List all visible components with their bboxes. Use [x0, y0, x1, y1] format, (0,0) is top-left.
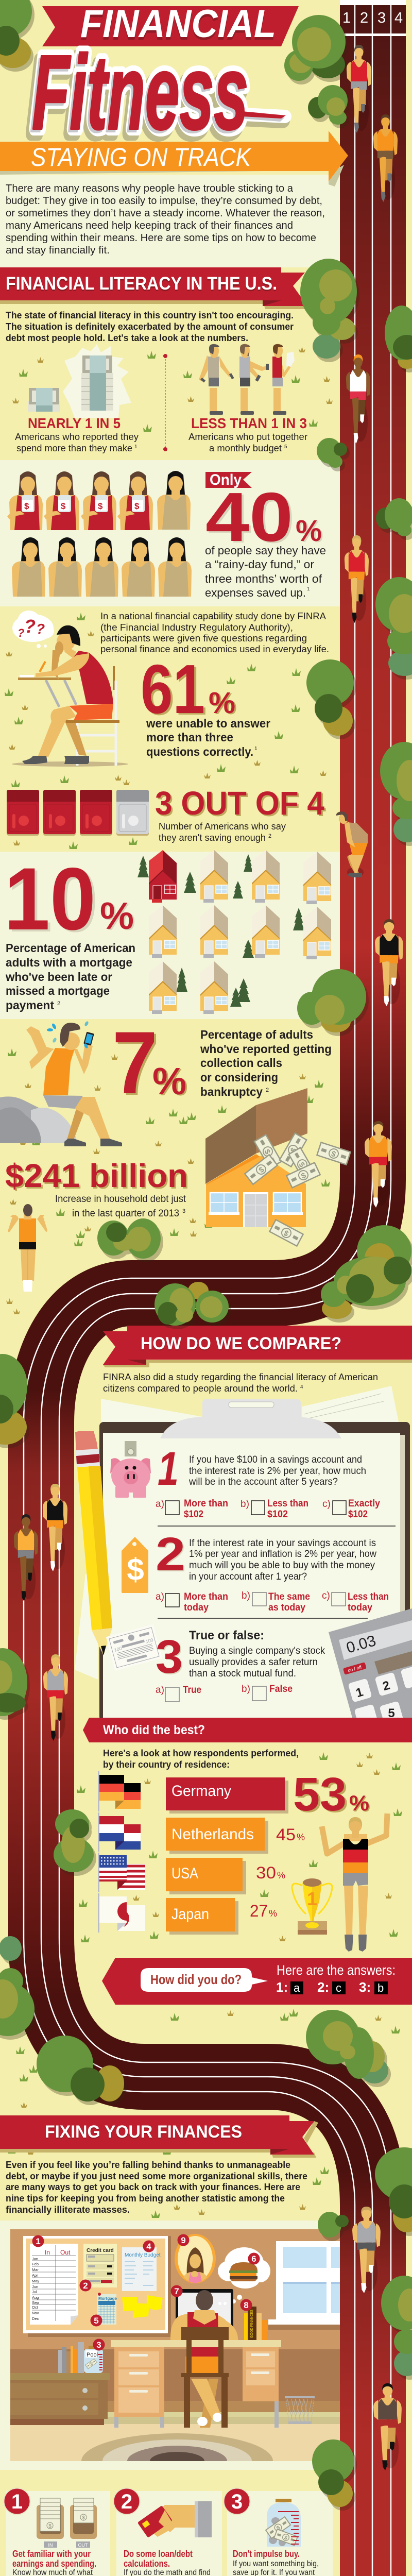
answers ribbon: Here are the answers: — [277, 1962, 396, 1978]
question 3: a) — [156, 1685, 164, 1696]
question 3: False — [269, 1684, 293, 1694]
track lane numbers top: 3 — [377, 10, 386, 26]
portrait — [175, 2234, 216, 2283]
stat: only 40 percent: % — [296, 514, 322, 548]
cabinet with books and pool jar — [10, 2342, 110, 2425]
icon: calculator — [329, 1608, 412, 1728]
illustration: trophy — [292, 1878, 332, 1935]
question 3: Buying a single company's stock — [189, 1646, 325, 1656]
monthly budget note — [122, 2247, 161, 2291]
room illustration — [10, 2229, 340, 2461]
room number badges: 2 — [83, 2281, 88, 2291]
icon: calculator: 1 — [354, 1685, 365, 1700]
stat: less than 1 in 3 — [188, 415, 307, 453]
sticky notes — [122, 2295, 163, 2318]
stat: 10 percent: missed a mortgage — [6, 984, 110, 997]
answers ribbon: a — [294, 1981, 300, 1994]
title script: Fitness: Fitness — [32, 33, 248, 151]
stat: 7 percent: 7 — [112, 1013, 158, 1112]
bar: Germany 53%: % — [349, 1791, 369, 1815]
stat: 3 out of 4: Number of Americans who say — [159, 821, 286, 832]
bar: Japan 27%: 27 — [250, 1902, 268, 1920]
answers ribbon — [102, 1958, 412, 2005]
bar: USA 30% — [166, 1858, 285, 1894]
question 3: True or false: — [189, 1629, 264, 1642]
illustration: winning German athlete — [322, 1814, 387, 1952]
stat: 7 percent: Percentage of adults — [200, 1028, 313, 1041]
stat: 10 percent: % — [101, 895, 135, 938]
stat: 61 percent: 1 — [254, 746, 258, 752]
stat: 7 percent: collection calls — [200, 1056, 282, 1070]
icon: three budgeting men — [199, 344, 295, 415]
title banner: FINANCIAL: FINANCIAL — [80, 5, 276, 48]
stat: 7 percent: 2 — [266, 1087, 269, 1093]
stat: 3 out of 4: 3 OUT OF 4 — [157, 786, 326, 823]
calendar sheet: Jun — [32, 2284, 38, 2289]
stat: 61 percent: 61 — [143, 652, 207, 730]
stat: only 40 percent: Only — [210, 471, 242, 488]
desk and person from behind — [111, 2289, 281, 2428]
compare intro text — [103, 1372, 378, 1394]
tip badges: 1 — [11, 2490, 23, 2513]
credit card note: Credit card — [87, 2248, 114, 2253]
stat: 61 percent: more than three — [146, 731, 233, 744]
section ribbon: how do we compare: HOW DO WE COMPARE? — [141, 1335, 341, 1354]
icon: stock certificate: 100 — [145, 1637, 154, 1645]
mortgage note — [97, 2293, 117, 2325]
answers ribbon: 2: — [317, 1979, 329, 1995]
bar: Japan 27%: Japan — [171, 1906, 209, 1923]
section ribbon: fixing your finances — [0, 2115, 318, 2158]
stat: only 40 percent: 1 — [307, 586, 310, 592]
FINRA text — [100, 611, 329, 654]
illustration: house bursting with money — [205, 1088, 351, 1246]
stat: 10 percent: % — [100, 894, 134, 937]
tip 1 text — [12, 2549, 101, 2576]
results intro: by their country of residence: — [103, 1759, 230, 1770]
question 3: usually provides a safer return — [189, 1657, 318, 1668]
room number badges: 5 — [94, 2316, 99, 2326]
section intro text: debt most people hold. Let's take a look at the numbers. — [6, 333, 248, 343]
corkboard — [23, 2236, 171, 2337]
question 3: 3 — [157, 1632, 184, 1684]
stat: $241 billion: 3 — [182, 1208, 185, 1214]
icon: stock certificate: 100 — [114, 1646, 123, 1653]
stat: only 40 percent: % — [297, 515, 323, 549]
bar: USA 30%: 30 — [256, 1863, 276, 1882]
credit card note — [83, 2244, 117, 2287]
stat: nearly 1 in 5: Americans who reported they — [15, 432, 139, 442]
room number badges: 7 — [174, 2286, 179, 2296]
icon: calculator: 2 — [381, 1679, 391, 1693]
pictogram: ten women, four with savings jars: $ — [61, 501, 66, 511]
icon: price tag — [122, 1537, 148, 1593]
tip icon: in and out trays: OUT — [78, 2543, 88, 2548]
question 2: today — [184, 1602, 209, 1613]
stat: less than 1 in 3: Americans who put together — [188, 432, 307, 442]
question 3: b) — [242, 1684, 250, 1694]
clipboard quiz — [75, 1386, 410, 1721]
room number badges: 9 — [181, 2235, 186, 2245]
tip icon: in and out trays: $ — [48, 2523, 52, 2529]
tip badges: 2 — [121, 2490, 132, 2513]
wastebasket — [285, 2396, 315, 2424]
intro paragraph: There are many reasons why people have trouble sticking to a — [6, 183, 294, 194]
stat: 10 percent: 2 — [57, 1001, 60, 1007]
ribbon: who did the best — [83, 1718, 412, 1742]
question 2: in your account after 1 year? — [189, 1571, 307, 1582]
stat: only 40 percent — [205, 471, 326, 599]
bar: Germany 53%: % — [350, 1792, 370, 1816]
icon: pencil — [75, 1431, 112, 1655]
illustration: student taking a test: ? — [18, 626, 24, 639]
question 2: much will you be able to buy with the money — [189, 1560, 375, 1571]
tip 2 text: Do some loan/debt — [124, 2549, 193, 2559]
stat: nearly 1 in 5: 1 — [134, 444, 138, 450]
illustration: trophy: 1 — [307, 1888, 317, 1909]
calendar sheet: Feb — [32, 2262, 39, 2266]
question 2: a) — [156, 1591, 164, 1602]
illustration: man standing from behind — [8, 1204, 47, 1292]
title script: Fitness — [29, 33, 286, 156]
illustration: student taking a test: ? — [24, 616, 36, 637]
calendar sheet: Aug — [32, 2295, 39, 2300]
calendar sheet: May — [32, 2279, 39, 2283]
icon: piggy bank — [110, 1441, 151, 1498]
bar: Japan 27%: % — [269, 1908, 277, 1919]
question 3: True — [183, 1685, 201, 1696]
stat: only 40 percent: 40 — [205, 478, 293, 556]
stat: $241 billion: in the last quarter of 2013 — [72, 1208, 179, 1219]
tip icon: in and out trays: IN — [48, 2543, 53, 2548]
stat: less than 1 in 3: 5 — [284, 444, 287, 450]
calendar sheet: In — [45, 2249, 50, 2256]
compare intro text: FINRA also did a study regarding the financial literacy of American — [103, 1372, 378, 1382]
intro paragraph: budget: They give in too easily to impulse, they’re consumed by debt, — [6, 195, 322, 207]
stat: 10 percent: 10 — [7, 852, 98, 951]
tip icon: hand with credit card — [138, 2501, 212, 2538]
stat: $241 billion: $241 billion — [5, 1157, 188, 1194]
stat: 10 percent: Percentage of American — [6, 941, 135, 955]
illustration: student taking a test — [12, 611, 128, 767]
stat: 61 percent — [141, 650, 270, 758]
bar: Netherlands 45% — [166, 1818, 305, 1854]
title banner: FINANCIAL: FINANCIAL — [80, 2, 276, 46]
title script: Fitness: Fitness — [30, 36, 246, 154]
calendar sheet: Oct — [32, 2305, 39, 2310]
stat: 10 percent: adults with a mortgage — [6, 956, 132, 969]
track lane numbers top: 1 — [342, 10, 351, 26]
FINRA text: personal finance and economics used in everyday life. — [100, 644, 329, 654]
stat: only 40 percent: 40 — [208, 480, 295, 557]
pictogram: ten women, four with savings jars — [7, 471, 192, 597]
stat: $241 billion — [5, 1157, 190, 1219]
stat: 61 percent: were unable to answer — [146, 717, 270, 730]
icon: calculator: on / off — [347, 1664, 363, 1673]
calendar sheet: Dec — [32, 2316, 39, 2321]
stat: 10 percent — [4, 850, 135, 1012]
window — [268, 2241, 340, 2330]
stat: 3 out of 4: 3 OUT OF 4 — [155, 785, 324, 822]
fixing intro text: financially illiterate masses. — [6, 2205, 130, 2215]
question 2: b) — [242, 1590, 250, 1601]
stat: 7 percent: bankruptcy — [200, 1085, 263, 1098]
stat: $241 billion: $241 billion — [7, 1159, 190, 1196]
intro paragraph: and stay financially fit. — [6, 245, 110, 256]
results intro: Here's a look at how respondents performed, — [103, 1748, 299, 1758]
stat: 7 percent: % — [154, 1061, 188, 1104]
subtitle arrow: STAYING ON TRACK: STAYING ON TRACK — [31, 143, 252, 172]
question 1: c) — [322, 1499, 331, 1510]
thought bubble with burger — [218, 2247, 270, 2305]
illustration: student taking a test: ? — [36, 621, 45, 637]
ribbon: who did the best: Who did the best? — [103, 1723, 205, 1737]
stat: 7 percent: or considering — [200, 1071, 278, 1084]
compare intro text: 4 — [300, 1384, 303, 1390]
section ribbon: financial literacy in the U.S.: FINANCIAL LITERACY IN THE U.S. — [6, 274, 277, 294]
tip badges: 3 — [231, 2490, 243, 2513]
flag: USA — [98, 1853, 145, 1892]
pictogram: ten women, four with savings jars: $ — [98, 501, 103, 511]
stat: only 40 percent: three months’ worth of — [205, 572, 322, 585]
tip 2 text — [124, 2549, 217, 2576]
answers ribbon: How did you do? — [150, 1972, 242, 1987]
calendar sheet — [30, 2244, 78, 2325]
question 2: Less than — [348, 1591, 389, 1602]
stat: 3 out of 4: 2 — [268, 833, 271, 839]
room number badges — [32, 2234, 260, 2350]
tip icon: savings jar — [266, 2499, 301, 2547]
room number badges: 6 — [251, 2254, 256, 2264]
bar: Germany 53%: Germany — [171, 1783, 231, 1800]
icon: stock certificate — [106, 1624, 162, 1671]
calendar sheet: Nov — [32, 2311, 39, 2315]
flag: Germany — [98, 1771, 141, 1811]
question 1: $102 — [184, 1509, 203, 1520]
FINRA text: In a national financial capability study done by FINRA — [100, 611, 326, 621]
bar: Germany 53% — [166, 1768, 370, 1822]
question 1: b) — [241, 1499, 249, 1510]
stat: 10 percent: payment — [6, 998, 54, 1012]
room number badges: 8 — [244, 2300, 249, 2310]
stat: nearly 1 in 5 — [15, 415, 139, 453]
flag: Netherlands — [98, 1812, 141, 1852]
fixing intro text: debt, or maybe if you just need some more organizational skills, there — [6, 2171, 307, 2181]
stat: 61 percent: % — [210, 687, 237, 721]
answers ribbon: c — [336, 1981, 341, 1994]
question 2: The same — [268, 1591, 310, 1602]
fixing intro text — [6, 2160, 307, 2215]
stat: 61 percent: 61 — [141, 650, 205, 728]
section ribbon: fixing your finances: FIXING YOUR FINANCES — [45, 2122, 242, 2142]
icon: calculator: 5 — [388, 1706, 395, 1720]
question 3: than a stock mutual fund. — [189, 1668, 296, 1679]
title script: Fitness: Fitness — [32, 33, 248, 151]
stat: 7 percent — [112, 1013, 332, 1114]
stat: 10 percent: 10 — [4, 850, 96, 948]
subtitle arrow: STAYING ON TRACK — [0, 131, 348, 187]
pictogram: ten women, four with savings jars: $ — [24, 501, 29, 511]
dotted divider — [163, 354, 167, 451]
section intro text: The situation is definitely exacerbated by the amount of consumer — [6, 321, 294, 332]
stat: only 40 percent: expenses saved up. — [205, 586, 306, 599]
stat: 7 percent: who've reported getting — [200, 1042, 332, 1056]
stat: only 40 percent: of people say they have — [205, 544, 326, 557]
fixing intro text: nine tips for keeping you from being another statistic among the — [6, 2193, 285, 2204]
section ribbon: fixing your finances: FIXING YOUR FINANCES — [45, 2123, 242, 2143]
bar: Germany 53%: 53 — [295, 1770, 349, 1822]
track lane numbers top — [342, 10, 403, 26]
bar: Germany 53%: 53 — [293, 1768, 347, 1821]
question 1: $102 — [267, 1509, 288, 1520]
question 2 — [156, 1528, 389, 1613]
stat: 7 percent: 7 — [114, 1015, 160, 1114]
question 3: 3 — [156, 1631, 183, 1683]
stat: 7 percent: % — [152, 1060, 186, 1103]
illustration: stressed man on phone sitting on rocks — [0, 1021, 122, 1146]
section intro text — [6, 310, 294, 343]
stat: 10 percent: who've been late or — [5, 970, 112, 984]
question 1: More than — [184, 1498, 228, 1509]
intro paragraph: spending within their means. Here are some tips on how to become — [6, 232, 316, 244]
stat: 3 out of 4: they aren't saving enough — [159, 833, 266, 843]
question 1: the interest rate is 2% per year, how much — [189, 1466, 366, 1477]
question 1: If you have $100 in a savings account and — [189, 1454, 362, 1465]
answers ribbon: b — [377, 1981, 384, 1994]
calendar sheet: Apr — [32, 2273, 38, 2278]
tip 1 text: Get familiar with your — [12, 2549, 91, 2559]
fixing intro text: Even if you feel like you’re falling behind thanks to unmanageable — [6, 2160, 290, 2170]
room number badges: 3 — [96, 2340, 101, 2350]
title script: Fitness: Fitness — [29, 38, 245, 156]
tip 2 text: calculations. — [124, 2558, 170, 2569]
question 1 — [156, 1443, 380, 1520]
tip badges — [4, 2488, 251, 2576]
icon: four safes — [7, 790, 149, 836]
stat: less than 1 in 3: a monthly budget — [209, 443, 282, 453]
calendar sheet: Out — [60, 2249, 71, 2256]
icon: money stacks — [28, 344, 131, 418]
section ribbon: financial literacy in the U.S.: FINANCIAL LITERACY IN THE U.S. — [6, 275, 277, 295]
calendar sheet: Sep — [32, 2300, 39, 2305]
tip icon: in and out trays — [37, 2498, 97, 2548]
tip 1 text: earnings and spending. — [12, 2558, 96, 2569]
question 2: c) — [322, 1590, 330, 1601]
stat: 3 out of 4 — [155, 785, 326, 843]
fixing intro text: are many ways to get you back on track with your finances. Here are — [6, 2182, 300, 2192]
bar: Japan 27% — [166, 1898, 277, 1935]
bar: Netherlands 45%: % — [297, 1832, 305, 1842]
bar: USA 30%: % — [277, 1870, 285, 1880]
question 1: $102 — [348, 1509, 368, 1520]
results intro — [103, 1748, 299, 1770]
stat: $241 billion: Increase in household debt just — [55, 1194, 186, 1205]
rug — [81, 2433, 273, 2461]
stat: nearly 1 in 5: spend more than they make — [16, 443, 132, 453]
tip 3 text — [232, 2549, 321, 2576]
question 1: will be in the account after 5 years? — [188, 1477, 338, 1487]
section ribbon: financial literacy in the U.S. — [0, 267, 309, 309]
question 2: 2 — [156, 1528, 185, 1581]
FINRA text: participants were given five questions regarding — [100, 633, 307, 643]
question 2: More than — [184, 1591, 228, 1602]
intro paragraph: or sometimes they don’t have a steady income. Whatever the reason, — [6, 208, 325, 219]
stat: nearly 1 in 5: NEARLY 1 IN 5 — [28, 415, 121, 431]
cabinet with books and pool jar: Pool — [87, 2352, 98, 2358]
bar: Netherlands 45%: Netherlands — [171, 1826, 254, 1843]
stat: only 40 percent: a “rainy-day fund,” or — [205, 558, 314, 571]
mortgage note: Mortgage — [98, 2296, 117, 2301]
FINRA text: (the Financial Industry Regulatory Authority), — [100, 622, 293, 633]
calendar sheet: Jan — [32, 2257, 38, 2261]
calendar sheet: Jul — [32, 2290, 37, 2294]
tip 3 text: Don't impulse buy. — [233, 2549, 300, 2559]
track lane numbers top: 4 — [394, 10, 403, 26]
question 1: a) — [156, 1499, 164, 1510]
question 2: today — [348, 1602, 372, 1613]
answers ribbon: 3: — [359, 1979, 371, 1995]
good finances books: GOOD FINANCES — [249, 2310, 254, 2338]
section ribbon: how do we compare — [103, 1326, 412, 1367]
stat: 61 percent: questions correctly. — [146, 745, 253, 758]
intro paragraph: many Americans need help keeping track of their finances and — [6, 220, 293, 231]
section ribbon: how do we compare: HOW DO WE COMPARE? — [141, 1334, 341, 1353]
room number badges: 4 — [146, 2242, 151, 2251]
question 2: as today — [268, 1602, 305, 1613]
bar: Netherlands 45%: 45 — [276, 1825, 296, 1844]
question 1: Less than — [267, 1498, 308, 1509]
intro paragraph — [6, 183, 325, 256]
good finances books — [244, 2307, 267, 2340]
pictogram: ten women, four with savings jars: $ — [134, 501, 140, 511]
track lane numbers top: 2 — [360, 10, 368, 26]
stat: 61 percent: % — [209, 686, 235, 720]
bar: USA 30%: USA — [171, 1865, 198, 1882]
compare intro text: citizens compared to people around the world. — [103, 1383, 298, 1394]
question 2: If the interest rate in your savings account is — [189, 1538, 376, 1549]
icon: calculator: 0.03 — [345, 1632, 378, 1657]
section intro text: The state of financial literacy in this country isn't too encouraging. — [6, 310, 294, 320]
flag: Japan — [98, 1893, 145, 1933]
stat: less than 1 in 3: LESS THAN 1 IN 3 — [191, 415, 307, 431]
tip icon: in and out trays: $ — [82, 2515, 85, 2521]
monthly budget note: Monthly Budget — [125, 2252, 161, 2258]
question 1: Exactly — [348, 1498, 380, 1509]
tip 3 text: If you want something big, — [233, 2560, 319, 2568]
question 3 — [156, 1629, 325, 1702]
question 1: 1 — [158, 1443, 179, 1495]
icon: price tag: $ — [127, 1552, 144, 1587]
pictogram: ten houses, one in red — [138, 850, 331, 1014]
room number badges: 1 — [36, 2236, 41, 2246]
question 2: 2 — [157, 1529, 186, 1582]
calendar sheet: Mar — [32, 2267, 39, 2272]
answers ribbon: 1: — [276, 1979, 288, 1995]
question 2: 1% per year and inflation is 2% per year, how — [189, 1549, 376, 1560]
